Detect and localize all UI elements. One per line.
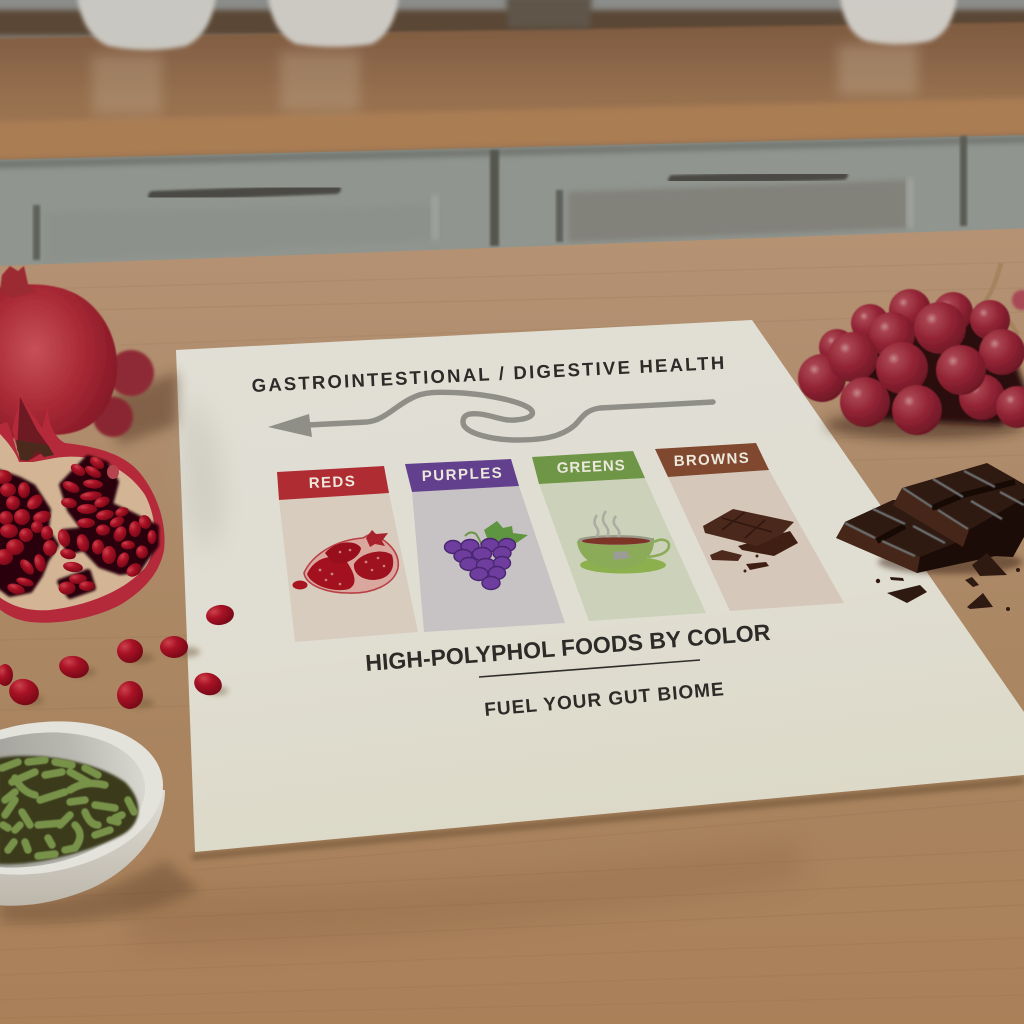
upper chocolate bar xyxy=(893,463,1024,557)
browns panel body xyxy=(668,470,844,611)
chocolate bar xyxy=(836,463,1024,611)
greens header xyxy=(532,451,645,484)
loose pomegranate arils xyxy=(0,603,235,709)
cabinet handles xyxy=(153,175,843,196)
bunch of red grapes xyxy=(798,263,1024,439)
chocolate crumbs xyxy=(876,553,1020,611)
bowl of green tea leaves xyxy=(0,704,200,923)
icon: chocolate xyxy=(703,509,798,572)
panel: greens xyxy=(532,451,706,621)
icon: grapes xyxy=(444,521,528,590)
panel: purples xyxy=(405,459,565,632)
browns header xyxy=(655,443,769,477)
tagline: FUEL YOUR GUT BIOME xyxy=(484,679,725,721)
counter canisters xyxy=(77,0,957,115)
panel: reds xyxy=(277,466,418,642)
paper shadow xyxy=(192,777,1024,860)
greens label: GREENS xyxy=(556,457,625,477)
halved pomegranate xyxy=(0,397,165,623)
purples panel body xyxy=(412,486,565,632)
arrow: digestive tract xyxy=(268,392,713,440)
whole pomegranate xyxy=(0,266,178,445)
reds panel body xyxy=(279,493,418,642)
panel: browns xyxy=(655,443,844,611)
background: wall and kitchen counter xyxy=(0,0,1024,160)
poster sheet xyxy=(176,320,1024,852)
reds header xyxy=(277,466,389,500)
cabinets xyxy=(0,135,1024,275)
reds label: REDS xyxy=(308,473,355,492)
purples header xyxy=(405,459,519,492)
purples label: PURPLES xyxy=(421,465,502,485)
poster title: GASTROINTESTIONAL / DIGESTIVE HEALTH xyxy=(251,352,725,396)
icon: green tea cup xyxy=(577,511,669,574)
seed clusters backing xyxy=(0,458,156,596)
greens panel body xyxy=(539,478,706,621)
lower chocolate bar xyxy=(836,500,1013,573)
browns label: BROWNS xyxy=(673,450,749,470)
subheading: HIGH-POLYPHOL FOODS BY COLOR xyxy=(364,619,772,676)
wooden table xyxy=(0,228,1024,1024)
icon: pomegranate xyxy=(292,530,398,593)
